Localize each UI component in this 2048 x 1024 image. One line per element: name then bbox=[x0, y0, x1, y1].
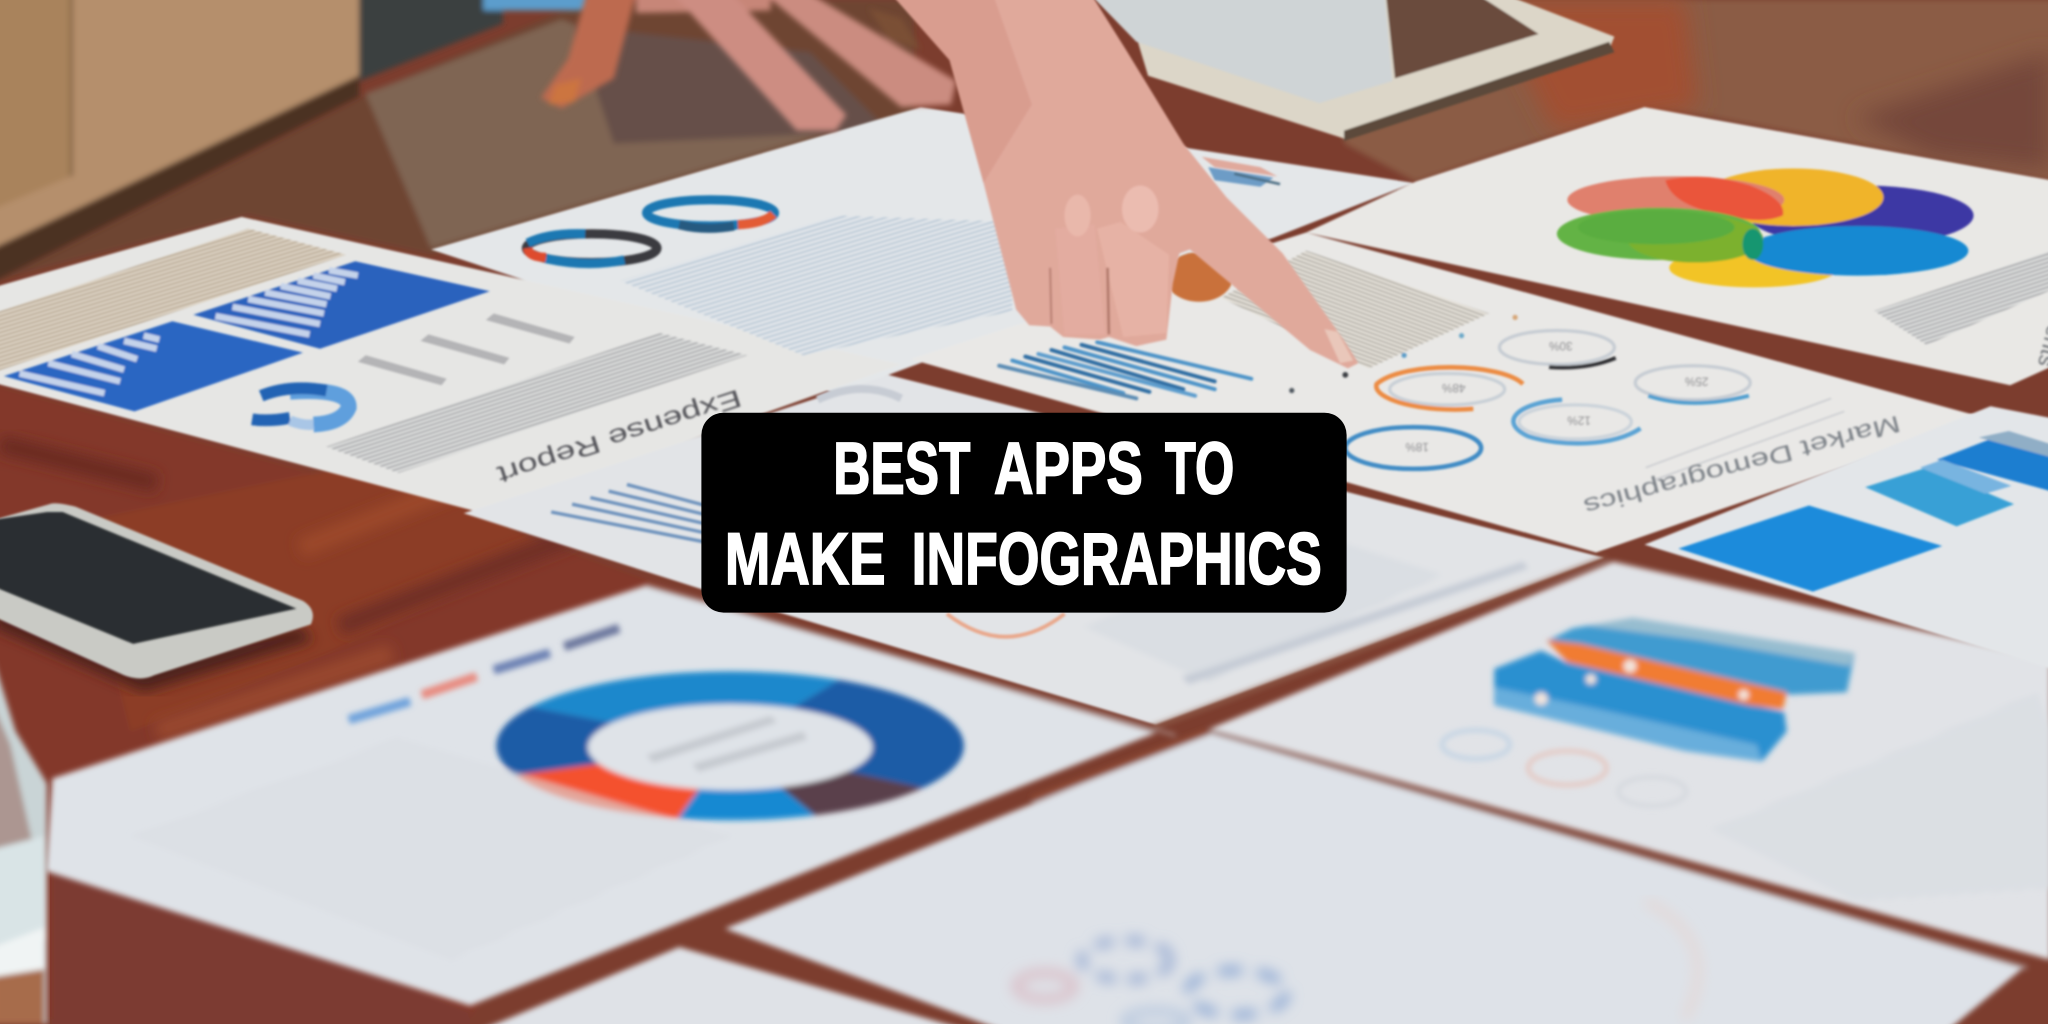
panel: top middle page content bbox=[526, 157, 1280, 355]
hand: pointing hand bbox=[891, 0, 1358, 368]
text block: tan column bbox=[0, 229, 346, 372]
bar chart: lower blue panel bbox=[4, 321, 303, 411]
chart: orange ring: 48% bbox=[1441, 381, 1465, 394]
panel: sheets of paper bbox=[0, 107, 2048, 725]
panel: large donut page content bbox=[344, 621, 968, 825]
bar chart: diagonal blue stripes bbox=[999, 342, 1251, 398]
badge background bbox=[701, 413, 1347, 613]
title badge bbox=[701, 413, 1347, 613]
sheet: expense report page bbox=[0, 217, 901, 513]
title: line one: APPS bbox=[994, 429, 1143, 510]
chart: small striped bars behind the hand bbox=[1202, 157, 1280, 187]
small list rows bbox=[358, 313, 575, 385]
sheet gap lines bbox=[647, 558, 2027, 968]
text block: below badge bbox=[1084, 536, 1443, 682]
panel: 3D blue chart content bbox=[1442, 618, 2048, 901]
chart: venn diagram bbox=[1557, 168, 1974, 287]
chart: lower donut bbox=[526, 234, 657, 264]
hand: background fingers bbox=[541, 0, 956, 131]
donut centre label bbox=[647, 716, 807, 772]
text block: column text bbox=[1221, 251, 1489, 368]
heading: expense report: Expense Report bbox=[494, 384, 744, 488]
tablet device bbox=[1089, 0, 1614, 141]
text block: venn caption bbox=[1874, 251, 2048, 345]
chart: upper blue layer bbox=[1546, 618, 1855, 695]
chart: blue ring lower bbox=[1345, 427, 1481, 469]
title: line one: BEST bbox=[833, 429, 970, 510]
panel: expense report content bbox=[0, 229, 747, 488]
icon: orange object behind hand bbox=[1165, 252, 1233, 302]
rules above heading bbox=[1646, 398, 1844, 481]
chart: lower blue layer bbox=[1494, 650, 1787, 761]
chart: stepped blue blocks bbox=[1865, 431, 2048, 526]
sheet: bottom left blurred page bbox=[477, 947, 973, 1024]
text block: faded columns bbox=[1711, 692, 2048, 901]
panel: right page charts bbox=[1678, 431, 2048, 592]
wood grain streaks bbox=[0, 444, 575, 731]
chart: grey ring with dark arc bbox=[1499, 330, 1616, 367]
sheet: right blue squares page bbox=[1644, 406, 2048, 669]
bar chart: upper blue panel bbox=[193, 261, 490, 349]
sheet: top middle donut page bbox=[431, 107, 1413, 394]
chart: grey ring with dark arc: 30% bbox=[1549, 339, 1573, 352]
bar chart: blue stripes near badge bbox=[551, 485, 705, 542]
chart: large donut bbox=[492, 666, 968, 825]
chart: blue ring centre: 12% bbox=[1567, 414, 1591, 427]
small faded rings bbox=[1442, 730, 1686, 806]
sheet: lower right blurred page bbox=[725, 733, 2023, 1024]
chart: grey ring with blue arc: 25% bbox=[1684, 374, 1708, 387]
sheet: middle page under the title badge bbox=[464, 375, 1604, 725]
chart: blurred pale curve bbox=[1646, 901, 1698, 1019]
chart: blurred small donuts bbox=[1016, 940, 1287, 1024]
panel: bottom page rings bbox=[1016, 901, 1698, 1024]
chart: pale lower stripe bbox=[1494, 687, 1762, 761]
chart: blue ring centre bbox=[1513, 400, 1640, 443]
chart: orange ring bbox=[1376, 367, 1523, 410]
title: line two: MAKE bbox=[725, 519, 886, 600]
title: line one: TO bbox=[1165, 429, 1234, 510]
sheet: top right venn page bbox=[1306, 107, 2048, 385]
panel: venn diagram page content bbox=[1557, 168, 2048, 369]
phone screen bbox=[0, 512, 296, 644]
chart dots bbox=[1535, 660, 1749, 705]
chart: grey ring with blue arc bbox=[1635, 366, 1750, 403]
chart: orange layer bbox=[1546, 640, 1787, 709]
chart: orange ring below badge bbox=[947, 614, 1064, 637]
background wall panels bbox=[0, 0, 590, 282]
panel: middle page content bbox=[551, 389, 1064, 637]
small chart marker bbox=[818, 389, 901, 400]
sheet: market demographics page bbox=[910, 232, 1985, 552]
chart: large blue square bbox=[1678, 505, 1942, 592]
icon: glass on the left bbox=[0, 660, 47, 1024]
icon: smartphone bbox=[0, 503, 313, 692]
sheet: large donut page bbox=[46, 585, 1156, 1006]
phone body bbox=[0, 503, 313, 679]
panel: market demographics page content bbox=[999, 251, 1903, 520]
sheet: blue 3D chart page bbox=[1209, 562, 2048, 960]
text block: bluish paragraph bbox=[620, 216, 1012, 355]
text block: report paragraph bbox=[327, 333, 747, 473]
chart: blue ring lower: 18% bbox=[1405, 440, 1429, 453]
phone shadow bbox=[0, 607, 313, 692]
title: line two: INFOGRAPHICS bbox=[912, 519, 1322, 600]
text block: faded paragraph bbox=[131, 738, 731, 960]
heading: faded title bbox=[1182, 562, 1528, 684]
heading: market demographics: Market Demographics bbox=[1581, 411, 1903, 520]
chart: small blue donut bbox=[252, 388, 349, 425]
chart dots bbox=[1289, 315, 1518, 393]
chart: donut hole bbox=[588, 704, 872, 790]
chart: upper faded highlight bbox=[1587, 618, 1855, 666]
right wood streaks bbox=[1489, 0, 2048, 170]
chart: upper donut bbox=[647, 200, 775, 228]
legend dashes bbox=[349, 628, 619, 720]
